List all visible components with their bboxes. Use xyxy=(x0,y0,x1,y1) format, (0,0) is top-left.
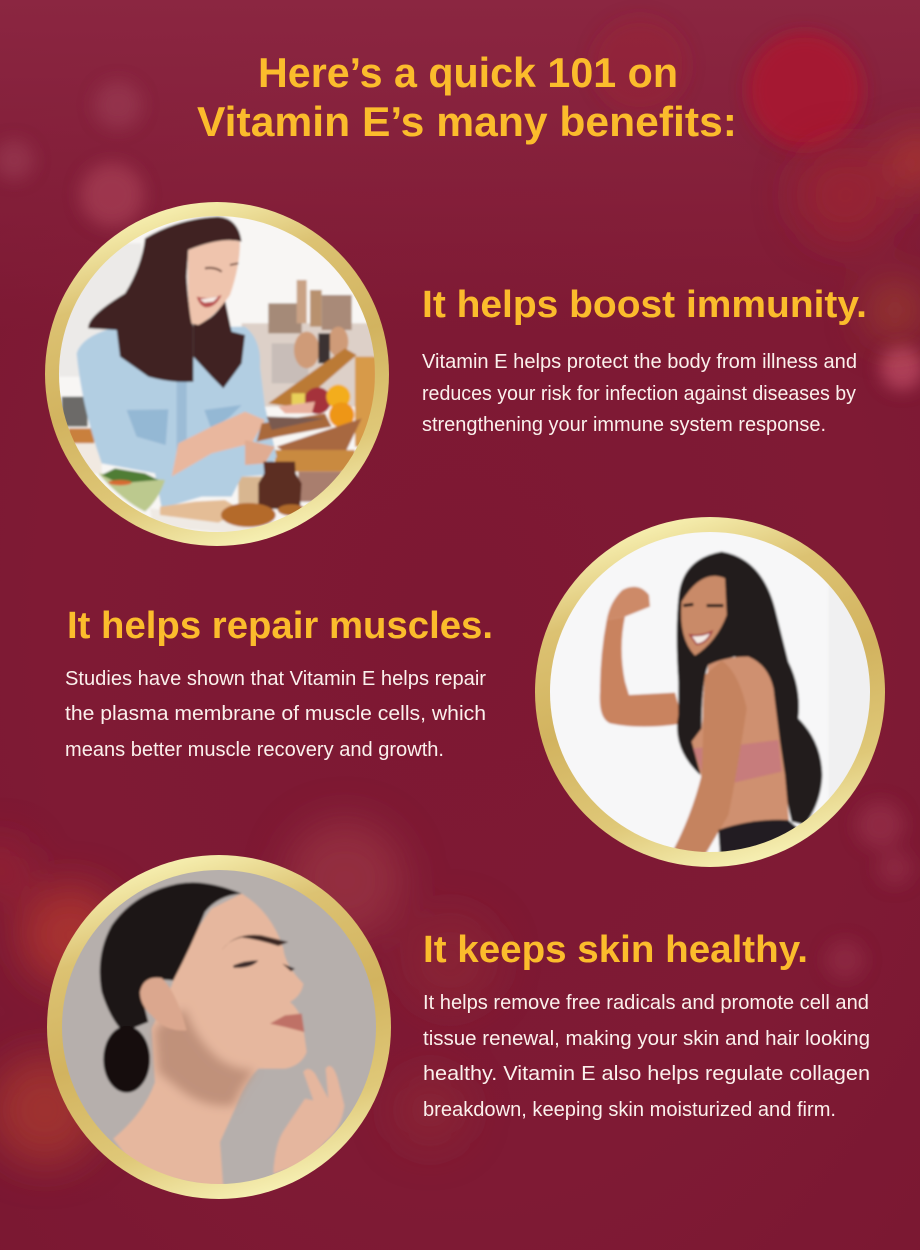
eye xyxy=(233,960,258,968)
body text: immunity: reduces your risk for infection against diseases by xyxy=(422,383,856,405)
arm xyxy=(172,412,265,477)
arm xyxy=(600,617,683,727)
skin xyxy=(113,894,307,1189)
body text: skin: healthy. Vitamin E also helps regulate collagen xyxy=(423,1063,870,1085)
hand xyxy=(273,1066,344,1174)
sandwich xyxy=(257,413,332,442)
hair xyxy=(88,217,242,382)
body text: muscles: the plasma membrane of muscle cells, which xyxy=(65,703,486,725)
plate with bread and croissant xyxy=(150,509,268,532)
body text: muscles: Studies have shown that Vitamin E helps repair xyxy=(65,668,486,690)
body text: skin: tissue renewal, making your skin and hair looking xyxy=(423,1028,870,1050)
body text: skin xyxy=(423,992,870,1121)
photo: woman in kitchen with gold ring xyxy=(45,200,390,550)
panel: skin xyxy=(45,852,870,1202)
pants xyxy=(718,820,798,855)
face xyxy=(681,576,727,656)
jar xyxy=(258,462,302,510)
photo: woman profile with gold ring xyxy=(45,852,395,1202)
body text: immunity xyxy=(422,351,857,436)
photo: woman flexing arm with gold ring xyxy=(535,515,885,870)
brow xyxy=(230,934,288,948)
bra xyxy=(693,740,782,782)
body text: muscles: means better muscle recovery and growth. xyxy=(65,739,444,761)
panel: muscles xyxy=(65,515,885,870)
salad xyxy=(98,473,165,512)
heading: boost immunity: It helps boost immunity. xyxy=(422,284,867,326)
torso xyxy=(692,657,789,830)
face xyxy=(188,240,240,325)
body text: skin: breakdown, keeping skin moisturized and firm. xyxy=(423,1099,836,1121)
body text: immunity: Vitamin E helps protect the body from illness and xyxy=(422,351,857,373)
hair xyxy=(100,882,242,1032)
body text: muscles xyxy=(65,668,486,761)
heading: skin healthy: It keeps skin healthy. xyxy=(423,929,808,971)
ear xyxy=(140,978,187,1030)
bun xyxy=(103,1026,150,1093)
body text: skin: It helps remove free radicals and promote cell and xyxy=(423,992,869,1014)
title: Here’s a quick 101 on xyxy=(258,49,678,96)
title: Vitamin E’s many benefits: xyxy=(197,98,737,145)
title xyxy=(197,49,737,145)
shirt xyxy=(77,327,277,508)
fist xyxy=(607,587,650,620)
hair back xyxy=(677,552,822,825)
body text: immunity: strengthening your immune system response. xyxy=(422,414,826,436)
front arm xyxy=(673,661,747,855)
heading: repair muscles: It helps repair muscles. xyxy=(67,605,493,647)
panel: immunity xyxy=(45,200,867,550)
lips xyxy=(270,1014,304,1032)
